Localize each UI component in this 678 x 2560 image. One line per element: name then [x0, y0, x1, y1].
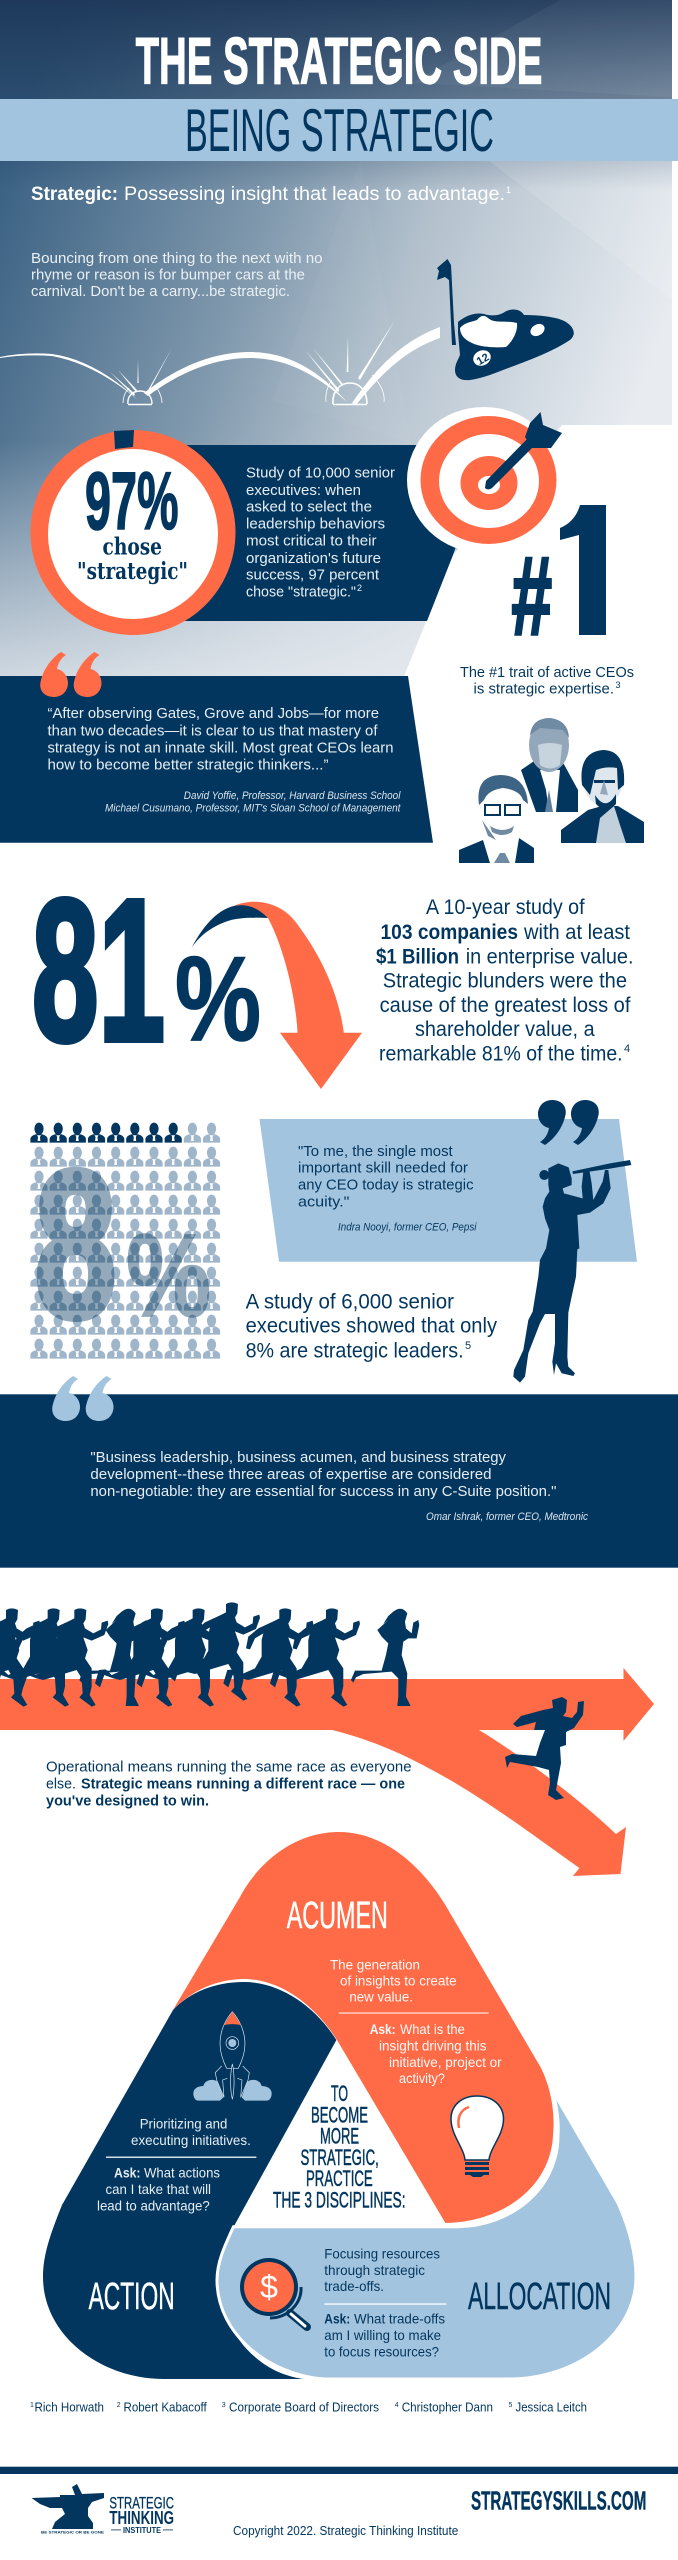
- footnotes: Corporate Board of Directors: [229, 2401, 379, 2415]
- acumen text: What is the: [400, 2021, 465, 2037]
- bumper cars paragraph: carnival. Don't be a carny...be strategic.: [31, 284, 290, 300]
- allocation text: trade-offs.: [324, 2278, 384, 2294]
- quote text: non-negotiable: they are essential for success in any C-Suite position.": [90, 1484, 556, 1500]
- panel: 97 percent study: [185, 445, 480, 621]
- icon: anvil: [32, 2484, 104, 2529]
- acumen text: Ask:: [370, 2021, 396, 2037]
- copyright: Copyright 2022. Strategic Thinking Institute: [233, 2524, 458, 2538]
- center heading: the 3 disciplines: PRACTICE: [306, 2166, 373, 2191]
- allocation text: Ask:: [324, 2311, 350, 2327]
- logo: Strategic Thinking Institute: INSTITUTE: [123, 2525, 161, 2535]
- icon: bumper car: 12: [475, 351, 491, 368]
- footnotes: 2: [117, 2402, 121, 2409]
- big number 8 percent overlay: [35, 1129, 211, 1361]
- allocation text: to focus resources?: [324, 2343, 439, 2359]
- bumper cars paragraph: [31, 251, 323, 300]
- center heading: the 3 disciplines: MORE: [320, 2124, 359, 2149]
- 81 percent study text: remarkable 81% of the time.: [379, 1043, 623, 1066]
- panel: acumen: [173, 1832, 554, 2223]
- portrait: Andy Grove: [521, 718, 578, 812]
- footnotes: Christopher Dann: [402, 2401, 493, 2415]
- definition of strategic: Possessing insight that leads to advantage.: [124, 184, 505, 205]
- study text: [246, 466, 395, 601]
- center heading: the 3 disciplines: [273, 2081, 406, 2212]
- quote attribution: Indra Nooyi, former CEO, Pepsi: [338, 1222, 477, 1234]
- icon: target with dart: [407, 407, 562, 553]
- big number 8 percent overlay: %: [126, 1210, 211, 1342]
- silhouette: lone runner on branch: [505, 1697, 584, 1800]
- operational vs strategic text: [46, 1760, 412, 1810]
- operational vs strategic text: else.: [46, 1777, 76, 1793]
- action text: Prioritizing and: [140, 2116, 227, 2132]
- impact splash 1: [110, 348, 172, 404]
- 8 percent study text: executives showed that only: [246, 1315, 497, 1338]
- bumper cars paragraph: rhyme or reason is for bumper cars at the: [31, 268, 305, 284]
- quote text: [298, 1144, 474, 1211]
- acumen text: of insights to create: [340, 1973, 457, 1989]
- big number 81 percent: 81: [32, 857, 165, 1083]
- number one heading: [512, 505, 606, 658]
- 8 percent study text: A study of 6,000 senior: [246, 1290, 454, 1313]
- quote text: [90, 1450, 556, 1500]
- quote text: than two decades—it is clear to us that mastery of: [48, 724, 378, 740]
- 81 percent study text: 103 companies: [380, 921, 518, 944]
- donut: 97 percent chose strategic: "strategic": [77, 558, 188, 585]
- quote mark: [52, 1376, 114, 1421]
- quote attribution: [105, 790, 401, 814]
- quote text: important skill needed for: [298, 1161, 468, 1177]
- hero gradient background: [0, 0, 672, 676]
- 81 percent study text: $1 Billion: [376, 945, 459, 968]
- acumen text: activity?: [399, 2070, 445, 2086]
- portrait: Steve Jobs: [561, 750, 644, 843]
- quote attribution: David Yoffie, Professor, Harvard Business School: [184, 790, 401, 802]
- study text: success, 97 percent: [246, 568, 379, 584]
- silhouette: woman with telescope: [513, 1160, 631, 1383]
- number one trait text: [460, 665, 634, 698]
- action text: lead to advantage?: [97, 2197, 210, 2213]
- footnotes: Jessica Leitch: [516, 2401, 587, 2415]
- study text: most critical to their: [246, 534, 377, 550]
- 8 percent study text: 5: [465, 1340, 471, 1352]
- 81 percent study text: shareholder value, a: [415, 1018, 595, 1041]
- definition of strategic: 1: [506, 185, 511, 195]
- center heading: the 3 disciplines: BECOME: [311, 2102, 368, 2127]
- definition of strategic: Strategic:: [31, 184, 118, 205]
- footer rule: [0, 2467, 678, 2474]
- logo: Strategic Thinking Institute: THINKING: [109, 2508, 174, 2528]
- bumper cars paragraph: Bouncing from one thing to the next with no: [31, 251, 323, 267]
- closing quote mark: [538, 1100, 599, 1145]
- icon: bumper car: [437, 259, 574, 380]
- action text: Ask:: [114, 2165, 140, 2181]
- donut: 97 percent chose strategic: chose: [102, 534, 162, 560]
- logo: Strategic Thinking Institute: BE STRATEGIC OR BE GONE: [41, 2530, 105, 2534]
- 81 percent study text: Strategic blunders were the: [383, 970, 627, 993]
- center heading: the 3 disciplines: THE 3 DISCIPLINES:: [273, 2187, 406, 2212]
- study text: organization's future: [246, 551, 381, 567]
- impact splash 2: [305, 320, 395, 404]
- 81 percent study text: A 10-year study of: [426, 896, 585, 919]
- operational vs strategic text: Strategic means running a different race — one: [81, 1777, 405, 1793]
- panel: allocation: [217, 2088, 636, 2379]
- icon: magnifying glass with dollar: $: [260, 2269, 278, 2305]
- arrow: curved down: [192, 902, 362, 1089]
- center heading: the 3 disciplines: STRATEGIC,: [300, 2145, 379, 2170]
- allocation text: through strategic: [324, 2262, 425, 2278]
- heading: acumen: ACUMEN: [287, 1895, 388, 1937]
- study text: leadership behaviors: [246, 517, 385, 533]
- arrow: forked race path: [0, 1668, 654, 1876]
- allocation text: [324, 2246, 446, 2359]
- bouncing trail: [0, 320, 440, 405]
- 81 percent study text: 4: [624, 1043, 630, 1055]
- logo: Strategic Thinking Institute: [32, 2484, 174, 2535]
- 8 percent study text: [246, 1290, 497, 1362]
- number one heading: #: [512, 534, 552, 658]
- panel: Yoffie and Cusumano quote: [0, 652, 433, 843]
- logo: Strategic Thinking Institute: STRATEGIC: [109, 2494, 174, 2512]
- quote text: how to become better strategic thinkers...”: [48, 757, 329, 773]
- 81 percent study text: in enterprise value.: [466, 945, 634, 968]
- operational vs strategic text: Operational means running the same race as everyone: [46, 1760, 412, 1776]
- footnotes: Rich Horwath: [34, 2401, 104, 2415]
- panel: action: [43, 1982, 336, 2379]
- footnotes: 4: [395, 2402, 399, 2409]
- footnotes: Robert Kabacoff: [124, 2401, 207, 2415]
- action text: [97, 2116, 256, 2213]
- acumen text: new value.: [349, 1989, 413, 2005]
- 81 percent study text: with at least: [523, 921, 630, 944]
- operational vs strategic text: you've designed to win.: [46, 1794, 209, 1810]
- number one trait text: The #1 trait of active CEOs: [460, 665, 634, 681]
- panel: Indra Nooyi quote: [260, 1119, 637, 1262]
- portrait: Bill Gates: [459, 775, 534, 863]
- action text: What actions: [144, 2165, 220, 2181]
- quote text: "To me, the single most: [298, 1144, 453, 1160]
- quote attribution: Omar Ishrak, former CEO, Medtronic: [426, 1511, 588, 1523]
- quote mark: [40, 652, 102, 697]
- heading: action: ACTION: [89, 2276, 175, 2318]
- footnotes: 5: [508, 2402, 512, 2409]
- study text: asked to select the: [246, 500, 372, 516]
- study text: chose "strategic.": [246, 585, 356, 601]
- people grid: 8 of 100 highlighted: [30, 1123, 220, 1359]
- study text: executives: when: [246, 483, 361, 499]
- allocation text: am I willing to make: [324, 2327, 441, 2343]
- big number 8 percent overlay: 8: [35, 1129, 116, 1361]
- allocation text: Focusing resources: [324, 2246, 440, 2262]
- subtitle band: [0, 97, 678, 164]
- icon: rocket: [193, 2012, 272, 2101]
- 81 percent study text: [376, 896, 634, 1066]
- quote text: "Business leadership, business acumen, and business strategy: [90, 1450, 507, 1466]
- 8 percent study text: 8% are strategic leaders.: [246, 1339, 464, 1362]
- quote text: development--these three areas of expertise are considered: [90, 1467, 492, 1483]
- study text: Study of 10,000 senior: [246, 466, 395, 482]
- donut: 97 percent chose strategic: 97%: [85, 456, 178, 547]
- action text: executing initiatives.: [131, 2132, 251, 2148]
- 81 percent study text: cause of the greatest loss of: [380, 994, 631, 1017]
- quote text: any CEO today is strategic: [298, 1178, 474, 1194]
- number one trait text: is strategic expertise.: [474, 682, 614, 698]
- icon: light bulb: [451, 2096, 504, 2177]
- quote attribution: Michael Cusumano, Professor, MIT's Sloan School of Management: [105, 802, 401, 814]
- donut: 97 percent chose strategic: [30, 430, 236, 635]
- footnotes: 1: [30, 2402, 34, 2409]
- center heading: the 3 disciplines: TO: [331, 2081, 348, 2106]
- number one trait text: 3: [616, 680, 621, 690]
- quote text: strategy is not an innate skill. Most great CEOs learn: [48, 741, 394, 757]
- icon: magnifying glass with dollar: [240, 2258, 307, 2327]
- panel: Omar Ishrak quote: [0, 1376, 678, 1568]
- study text: 2: [357, 583, 362, 593]
- acumen text: initiative, project or: [389, 2054, 502, 2070]
- quote text: acuity.": [298, 1195, 349, 1211]
- acumen text: [330, 1956, 502, 2086]
- footnotes: 3: [222, 2402, 226, 2409]
- footnotes: [30, 2401, 587, 2415]
- acumen text: insight driving this: [379, 2038, 486, 2054]
- action text: can I take that will: [106, 2181, 211, 2197]
- quote text: “After observing Gates, Grove and Jobs—for more: [48, 706, 379, 722]
- big number 81 percent: %: [175, 932, 261, 1066]
- quote text: [48, 706, 394, 773]
- silhouettes: crowd of runners: [0, 1602, 419, 1707]
- allocation text: What trade-offs: [354, 2311, 445, 2327]
- acumen text: The generation: [330, 1956, 420, 1972]
